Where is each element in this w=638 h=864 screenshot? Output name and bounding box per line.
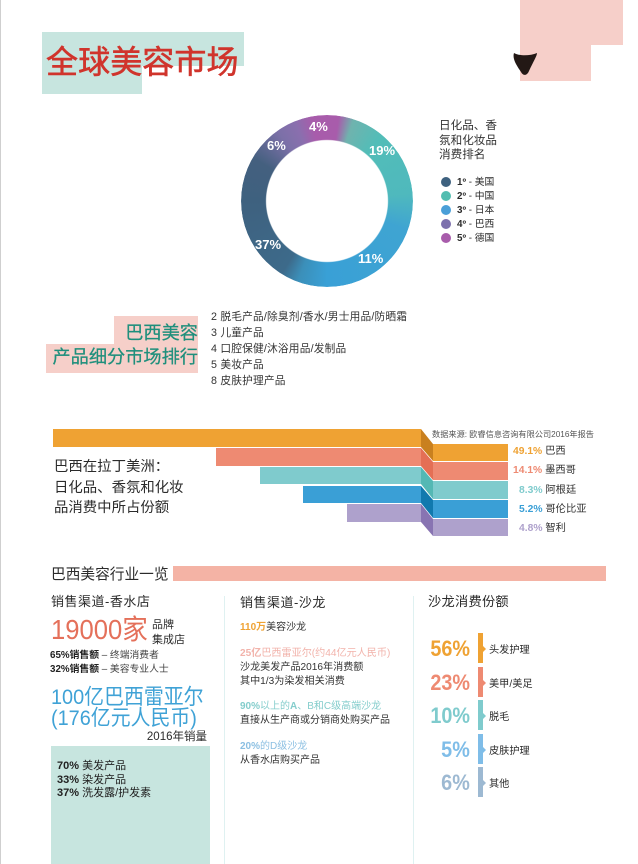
product list: 33% 染发产品 <box>57 774 126 786</box>
name: 皮肤护理 <box>489 746 530 757</box>
heading background upper <box>114 316 198 344</box>
title text: 全球美容市场 <box>46 44 239 80</box>
notch <box>483 680 486 686</box>
salon count: 110万美容沙龙 <box>240 622 306 633</box>
label 4%: 4% <box>309 119 328 134</box>
label argentina: 8.3% 阿根廷 <box>519 485 576 496</box>
product box <box>51 746 210 864</box>
row hair care <box>430 633 530 663</box>
legend title: 日化品、香 <box>439 119 497 132</box>
bar <box>478 633 483 663</box>
percent: 6% <box>441 770 470 795</box>
d-class salons: 从香水店购买产品 <box>240 755 320 766</box>
pink block lower <box>520 45 591 81</box>
heading text: 产品细分市场排行 <box>52 347 198 367</box>
notch <box>483 747 486 753</box>
chart labels <box>513 446 587 534</box>
panel: salon spending share <box>428 594 533 797</box>
ranking list: 5 美妆产品 <box>211 359 264 371</box>
legend text china: 2º - 中国 <box>457 191 494 202</box>
legend text brazil: 4º - 巴西 <box>457 219 494 230</box>
heading: product ranking <box>46 316 198 373</box>
legend dot germany <box>441 233 451 243</box>
label brazil: 49.1% 巴西 <box>513 446 566 457</box>
percent: 23% <box>430 670 470 695</box>
label chile: 4.8% 智利 <box>519 523 566 534</box>
bar <box>478 700 483 730</box>
row nails <box>430 667 533 697</box>
column heading: 销售渠道-沙龙 <box>240 595 326 610</box>
legend dot usa <box>441 177 451 187</box>
legend dot brazil <box>441 219 451 229</box>
salon spend: 25亿巴西雷亚尔(约44亿元人民币) <box>240 648 390 659</box>
ranking list: 8 皮肤护理产品 <box>211 375 286 387</box>
donut ring <box>241 115 413 287</box>
label 6%: 6% <box>267 138 286 153</box>
column heading: 沙龙消费份额 <box>428 594 509 609</box>
label 19%: 19% <box>369 143 395 158</box>
title background lower <box>42 66 142 94</box>
big number sales <box>51 685 204 730</box>
ranking list: 2 脱毛产品/除臭剂/香水/男士用品/防晒霜 <box>211 311 407 323</box>
panel: perfume stores <box>50 594 210 864</box>
label colombia: 5.2% 哥伦比亚 <box>519 504 587 515</box>
chart: latin america share <box>53 429 508 536</box>
section title: 巴西美容行业一览 <box>51 567 169 583</box>
product list: 37% 洗发露/护发素 <box>57 787 151 799</box>
high-end salons: 直接从生产商或分销商处购买产品 <box>240 715 390 726</box>
heading text <box>52 323 198 367</box>
stores description: 集成店 <box>152 634 185 646</box>
legend <box>439 119 497 244</box>
chart caption <box>54 458 184 516</box>
legend dot japan <box>441 205 451 215</box>
big number sales: (176亿元人民币) <box>51 706 197 730</box>
ranking list <box>211 310 407 387</box>
salon spend: 沙龙美发产品2016年消费额 <box>240 662 363 673</box>
donut chart <box>241 115 413 287</box>
page edge <box>0 0 1 864</box>
column heading: 销售渠道-香水店 <box>51 594 150 609</box>
corner decoration <box>514 0 623 81</box>
d-class salons <box>240 740 320 766</box>
notch <box>483 646 486 652</box>
section heading: brazil industry <box>51 566 606 583</box>
legend text germany: 5º - 德国 <box>457 233 494 244</box>
percent: 10% <box>430 703 470 728</box>
bar <box>478 734 483 764</box>
percent: 5% <box>441 737 470 762</box>
bar <box>478 767 483 797</box>
panel: salons <box>240 595 390 766</box>
label 37%: 37% <box>255 237 281 252</box>
section bar <box>173 566 606 581</box>
ranking list: 4 口腔保健/沐浴用品/发制品 <box>211 343 346 355</box>
legend text usa: 1º - 美国 <box>457 177 494 188</box>
name: 美甲/美足 <box>489 679 533 690</box>
data source: 数据来源: 欧睿信息咨询有限公司2016年报告 <box>432 430 594 439</box>
legend title: 氛和化妆品 <box>439 134 497 147</box>
sales split: 32%销售额 – 美容专业人士 <box>50 664 169 674</box>
percent: 56% <box>430 636 470 661</box>
sales split <box>50 650 169 674</box>
notch <box>483 780 486 786</box>
pink block upper <box>520 0 623 45</box>
name: 其他 <box>489 779 509 790</box>
sales year: 2016年销量 <box>147 731 207 743</box>
label 11%: 11% <box>358 251 383 266</box>
high-end salons <box>240 700 390 726</box>
notch <box>483 713 486 719</box>
row other <box>441 767 509 797</box>
name: 头发护理 <box>489 645 530 656</box>
legend title: 消费排名 <box>439 148 485 161</box>
ranking list: 3 儿童产品 <box>211 327 264 339</box>
legend dot china <box>441 191 451 201</box>
product list <box>57 760 151 799</box>
heading background lower <box>46 344 198 373</box>
chart caption: 巴西在拉丁美洲： <box>54 459 169 475</box>
stores description: 品牌 <box>152 619 174 631</box>
stores description <box>152 618 185 646</box>
bar <box>478 667 483 697</box>
title <box>42 32 244 94</box>
heading text: 巴西美容 <box>125 323 198 343</box>
icon: black shape <box>514 53 537 75</box>
chart caption: 日化品、香氛和化妆 <box>54 480 184 496</box>
name: 脱毛 <box>489 712 509 723</box>
salon spend <box>240 647 390 687</box>
row skin care <box>441 734 530 764</box>
row hair removal <box>430 700 509 730</box>
high-end salons: 90%以上的A、B和C级高端沙龙 <box>240 701 381 712</box>
chart caption: 品消费中所占份额 <box>54 500 169 516</box>
legend text japan: 3º - 日本 <box>457 205 494 216</box>
column dividers <box>224 596 225 864</box>
big number sales: 100亿巴西雷亚尔 <box>51 685 204 709</box>
label mexico: 14.1% 墨西哥 <box>513 465 576 476</box>
sales split: 65%销售额 – 终端消费者 <box>50 650 159 661</box>
product list: 70% 美发产品 <box>57 760 126 772</box>
legend title <box>439 119 497 161</box>
big number stores: 19000家 <box>51 614 148 645</box>
title background upper <box>42 32 244 66</box>
d-class salons: 20%的D级沙龙 <box>240 741 307 752</box>
salon spend: 其中1/3为染发相关消费 <box>240 676 345 687</box>
